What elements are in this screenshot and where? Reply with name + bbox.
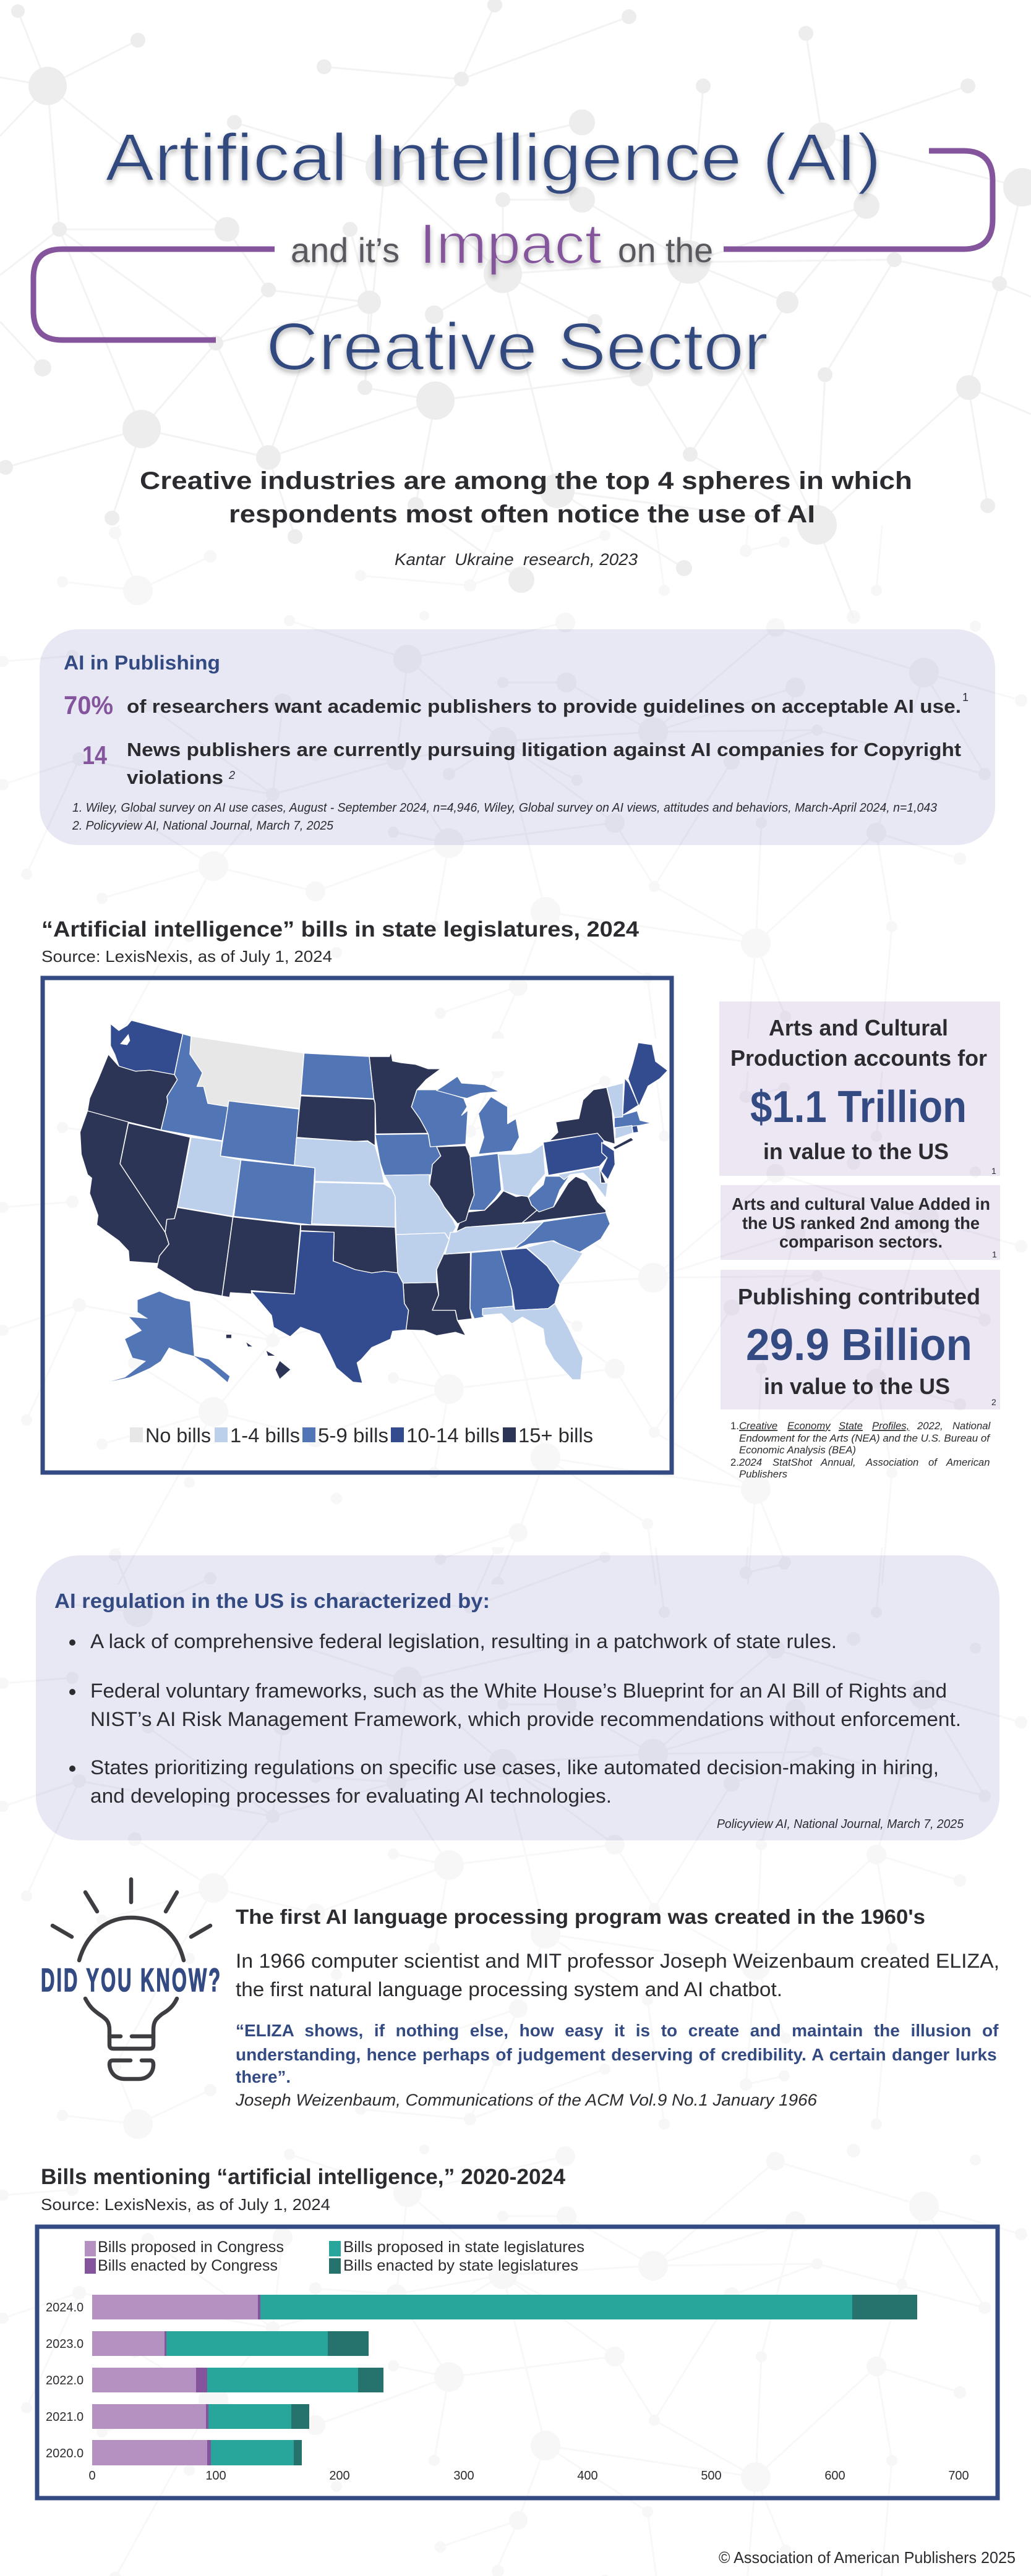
panel: AI regulation in the US (36, 1555, 999, 1840)
x axis labels: 700 (948, 2469, 969, 2483)
legend: 15+ bills: 15+ bills (518, 1424, 593, 1447)
ranked line 2: the US ranked 2nd among the (742, 1214, 980, 1233)
x axis labels: 400 (577, 2469, 598, 2483)
footnote 2: 2. Policyview AI, National Journal, March 7, 2025 (72, 819, 334, 833)
stat box footnotes: Publishers (739, 1468, 787, 1480)
bullet 2: NIST’s AI Risk Management Framework, which provide recommendations without enforcement. (90, 1708, 961, 1730)
legend: bills enacted by state legislatures: Bills enacted by state legislatures (343, 2257, 578, 2274)
stat box: 29.9 billion (721, 1270, 1000, 1409)
x axis labels: 300 (453, 2469, 474, 2483)
panel heading: AI regulation in the US is characterized by: (54, 1589, 490, 1612)
map heading: “Artificial intelligence” bills in state legislatures, 2024 (41, 917, 640, 942)
legend: 5-9 bills: 5-9 bills (318, 1424, 388, 1447)
did you know heading: The first AI language processing program was created in the 1960's (236, 1905, 925, 1928)
panel: AI in Publishing (40, 629, 995, 845)
reference 1: 1 (992, 1249, 997, 1259)
stat box line 2: Production accounts for (730, 1045, 987, 1071)
ranked line 1: Arts and cultural Value Added in (732, 1194, 990, 1214)
x axis labels: 200 (329, 2469, 350, 2483)
bullet 3: and developing processes for evaluating AI technologies. (90, 1785, 612, 1807)
panel source: Policyview AI, National Journal, March 7, 2025 (717, 1817, 964, 1831)
icon: light bulb with did you know (41, 1879, 222, 2079)
ranked line 3: comparison sectors. (779, 1232, 943, 1251)
y axis labels: 2021.0 (46, 2410, 83, 2424)
panel background (40, 629, 995, 845)
footnote 2: American (946, 1456, 990, 1468)
publishing line 1: Publishing contributed (738, 1284, 980, 1309)
did you know body: the first natural language processing system and AI chatbot. (236, 1978, 782, 2000)
title line 2: on the: on the (618, 231, 713, 270)
15+ bills states (80, 1052, 633, 1379)
quote: “ELIZA shows, if nothing else, how easy it is to create and maintain the illusion of (236, 2021, 999, 2040)
quote: understanding, hence perhaps of judgement deserving of credibility. A certain danger lurks (236, 2045, 997, 2064)
stat box footnotes: Endowment for the Arts (NEA) and the U.S. Bureau of (739, 1432, 991, 1444)
footnote 1: State (839, 1420, 863, 1432)
bullet 3: States prioritizing regulations on specific use cases, like automated decision-making in hiring, (90, 1756, 939, 1779)
map legend (130, 1424, 593, 1447)
footnote 1: Creative (739, 1420, 777, 1432)
y axis labels: 2023.0 (46, 2337, 83, 2351)
did you know body: In 1966 computer scientist and MIT professor Joseph Weizenbaum created ELIZA, (236, 1950, 999, 1972)
bar: 2024 (92, 2295, 917, 2319)
footnote 2: Association (865, 1456, 918, 1468)
footnote 1: Economy (787, 1420, 831, 1432)
chart frame (37, 2227, 998, 2498)
footnote 1: 1. (730, 1420, 739, 1432)
legend: bills proposed in congress: Bills proposed in Congress (98, 2238, 284, 2256)
choropleth map of US states (80, 1021, 668, 1383)
chart heading: Bills mentioning “artificial intelligence,” 2020-2024 (41, 2165, 566, 2189)
bullet 1: A lack of comprehensive federal legislation, resulting in a patchwork of state rules. (90, 1630, 837, 1652)
title line 2: Impact: Impact (419, 213, 602, 276)
1-4 bills states (178, 1083, 633, 1380)
did you know body (236, 1950, 999, 2000)
stat box footnotes: Economic Analysis (BEA) (739, 1444, 856, 1456)
Puget Sound cutout (120, 1034, 130, 1045)
bar: 2022 (92, 2368, 383, 2392)
y axis labels: 2024.0 (46, 2301, 83, 2315)
footnote 1: 2022, (917, 1420, 943, 1432)
panel background (36, 1555, 999, 1840)
quote: there”. (236, 2067, 291, 2086)
no bills: Montana (190, 1036, 304, 1108)
map source: Source: LexisNexis, as of July 1, 2024 (41, 947, 332, 966)
superscript 2: 2 (228, 769, 235, 781)
x axis labels: 600 (824, 2469, 845, 2483)
legend: 1-4 bills: 1-4 bills (230, 1424, 300, 1447)
title (105, 120, 881, 385)
title line 2: and it's: and it’s (291, 231, 400, 270)
bar: 2023 (92, 2331, 369, 2356)
legend: 10-14 bills: 10-14 bills (406, 1424, 500, 1447)
stat value: $1.1 Trillion (750, 1082, 967, 1132)
footnote 2: StatShot (772, 1456, 813, 1468)
stat box line 1: Arts and Cultural (769, 1015, 948, 1040)
reference 1: 1 (991, 1166, 996, 1176)
map frame (43, 978, 672, 1473)
footnote 2: 2. (730, 1456, 739, 1468)
y axis labels: 2022.0 (46, 2374, 83, 2387)
bullet 2 (69, 1680, 961, 1730)
stat text: violations: violations (127, 767, 223, 788)
icon: light bulb with did you know: DID YOU KNOW? (41, 1962, 222, 1999)
stat value: 29.9 Billion (746, 1320, 972, 1370)
bullet 2: Federal voluntary frameworks, such as the White House’s Blueprint for an AI Bill of Rights and (90, 1680, 947, 1702)
stat box: 1.1 trillion (719, 1001, 1000, 1176)
footnote 2: 2024 (738, 1456, 762, 1468)
footnote 2: of (928, 1456, 938, 1468)
10-14 bills states (111, 1021, 668, 1383)
decorative bracket: top right (724, 151, 993, 249)
stat box line 3: in value to the US (763, 1139, 949, 1164)
stat: 14: 14 (82, 741, 108, 770)
footnote 1: National (952, 1420, 991, 1432)
stat text: news publishers: News publishers are currently pursuing litigation against AI companies for Copyright (127, 739, 961, 760)
title line 1: Artifical Intelligence (AI) (105, 120, 881, 195)
legend: bills proposed in state legislatures: Bills proposed in state legislatures (343, 2238, 584, 2256)
panel heading: AI in Publishing (64, 652, 220, 674)
stat text: researchers: of researchers want academic publishers to provide guidelines on acceptable AI use. (127, 695, 961, 717)
subheading (140, 467, 912, 528)
decorative bracket: bottom left (33, 249, 275, 340)
chart legend (85, 2238, 584, 2274)
footnote 1: Profiles, (872, 1420, 909, 1432)
reference 2: 2 (991, 1397, 996, 1407)
stacked bar chart (46, 2295, 969, 2483)
copyright footer: © Association of American Publishers 2025 (719, 2548, 1016, 2567)
footnote 2: Annual, (820, 1456, 856, 1468)
superscript 1: 1 (962, 691, 969, 704)
bar: 2020 (92, 2440, 302, 2465)
5-9 bills states (111, 1034, 651, 1382)
bar: 2021 (92, 2404, 309, 2429)
stat box footnotes (730, 1420, 991, 1480)
quote attribution: Joseph Weizenbaum, Communications of the ACM Vol.9 No.1 January 1966 (235, 2091, 818, 2109)
y axis labels: 2020.0 (46, 2447, 83, 2460)
x axis labels: 0 (88, 2469, 96, 2483)
x axis labels: 100 (205, 2469, 226, 2483)
bullet 3 (69, 1756, 939, 1807)
title line 3: Creative Sector (266, 309, 768, 385)
quote (236, 2021, 999, 2086)
chart source: Source: LexisNexis, as of July 1, 2024 (41, 2195, 330, 2214)
legend: no bills: No bills (145, 1424, 211, 1447)
subheading source: Kantar Ukraine research, 2023 (395, 550, 638, 569)
y axis labels (46, 2301, 83, 2460)
publishing line 3: in value to the US (764, 1374, 950, 1399)
footnote 1: 1. Wiley, Global survey on AI use cases, August - September 2024, n=4,946, Wiley, Global survey on AI views, attitudes and behaviors, March-April 2024, n=1,043 (72, 801, 937, 815)
stat: 70%: 70% (64, 691, 113, 720)
subheading line 1: Creative industries are among the top 4 spheres in which (140, 467, 912, 495)
x axis labels: 500 (701, 2469, 722, 2483)
stat box: ranked 2nd (721, 1185, 1000, 1260)
legend: bills enacted by congress: Bills enacted by Congress (98, 2257, 278, 2274)
subheading line 2: respondents most often notice the use of AI (229, 501, 815, 528)
x axis labels (88, 2469, 969, 2483)
